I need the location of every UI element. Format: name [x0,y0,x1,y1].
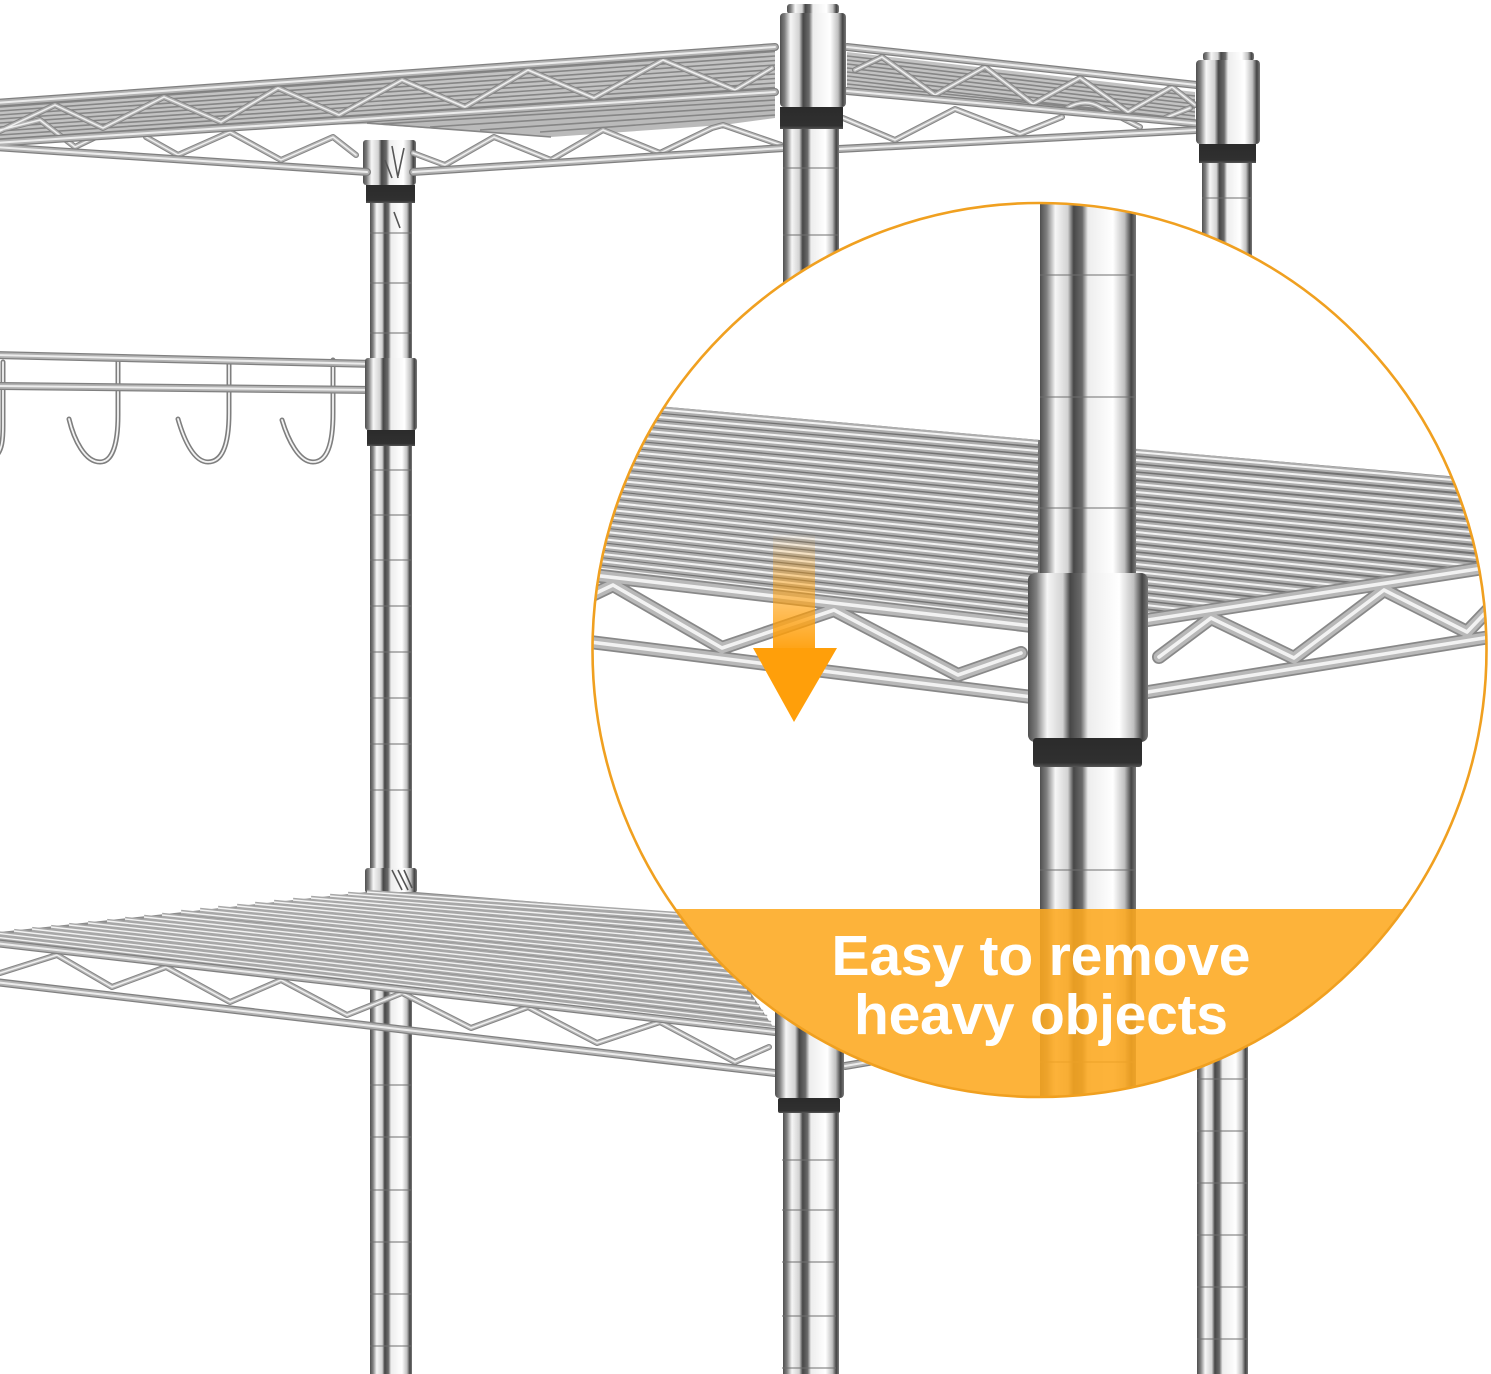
middle pole lower sleeve [775,940,844,1113]
magnified black ring [1033,738,1142,767]
middle pole cap [780,4,846,129]
magnified zigzag and rails: right [1148,567,1490,692]
caption text: Easy to remove [832,924,1250,988]
magnified pole [1028,200,1148,1100]
right pole [1196,52,1260,1374]
right pole cap [1196,52,1260,163]
hooks [0,360,333,462]
hook rail [0,355,417,462]
circle outline [592,203,1486,1097]
bottom shelf zigzag [0,955,769,1062]
magnified shelf: left side [590,400,1040,697]
top shelf rails [0,47,784,172]
top shelf wire infill [0,50,775,143]
orange caption band [676,909,1402,1096]
magnified sleeve [1028,573,1148,742]
rail bars [0,355,375,390]
magnified zigzag and rails: left [590,575,1032,697]
caption text [832,924,1250,1047]
bottom shelf rails [0,943,880,1073]
middle pole [780,4,846,1374]
top wire shelf: right span [839,47,1215,149]
magnified detail circle [580,200,1491,1109]
bottom shelf wires [0,892,775,1030]
icon: down arrow [753,533,837,722]
magnified shelf: right side [1136,449,1491,692]
top shelf zigzag wires [0,60,781,165]
bottom wire shelf [0,892,880,1073]
left pole [363,140,417,1374]
top wire shelf: left span [0,47,784,172]
caption text: heavy objects [854,983,1228,1047]
